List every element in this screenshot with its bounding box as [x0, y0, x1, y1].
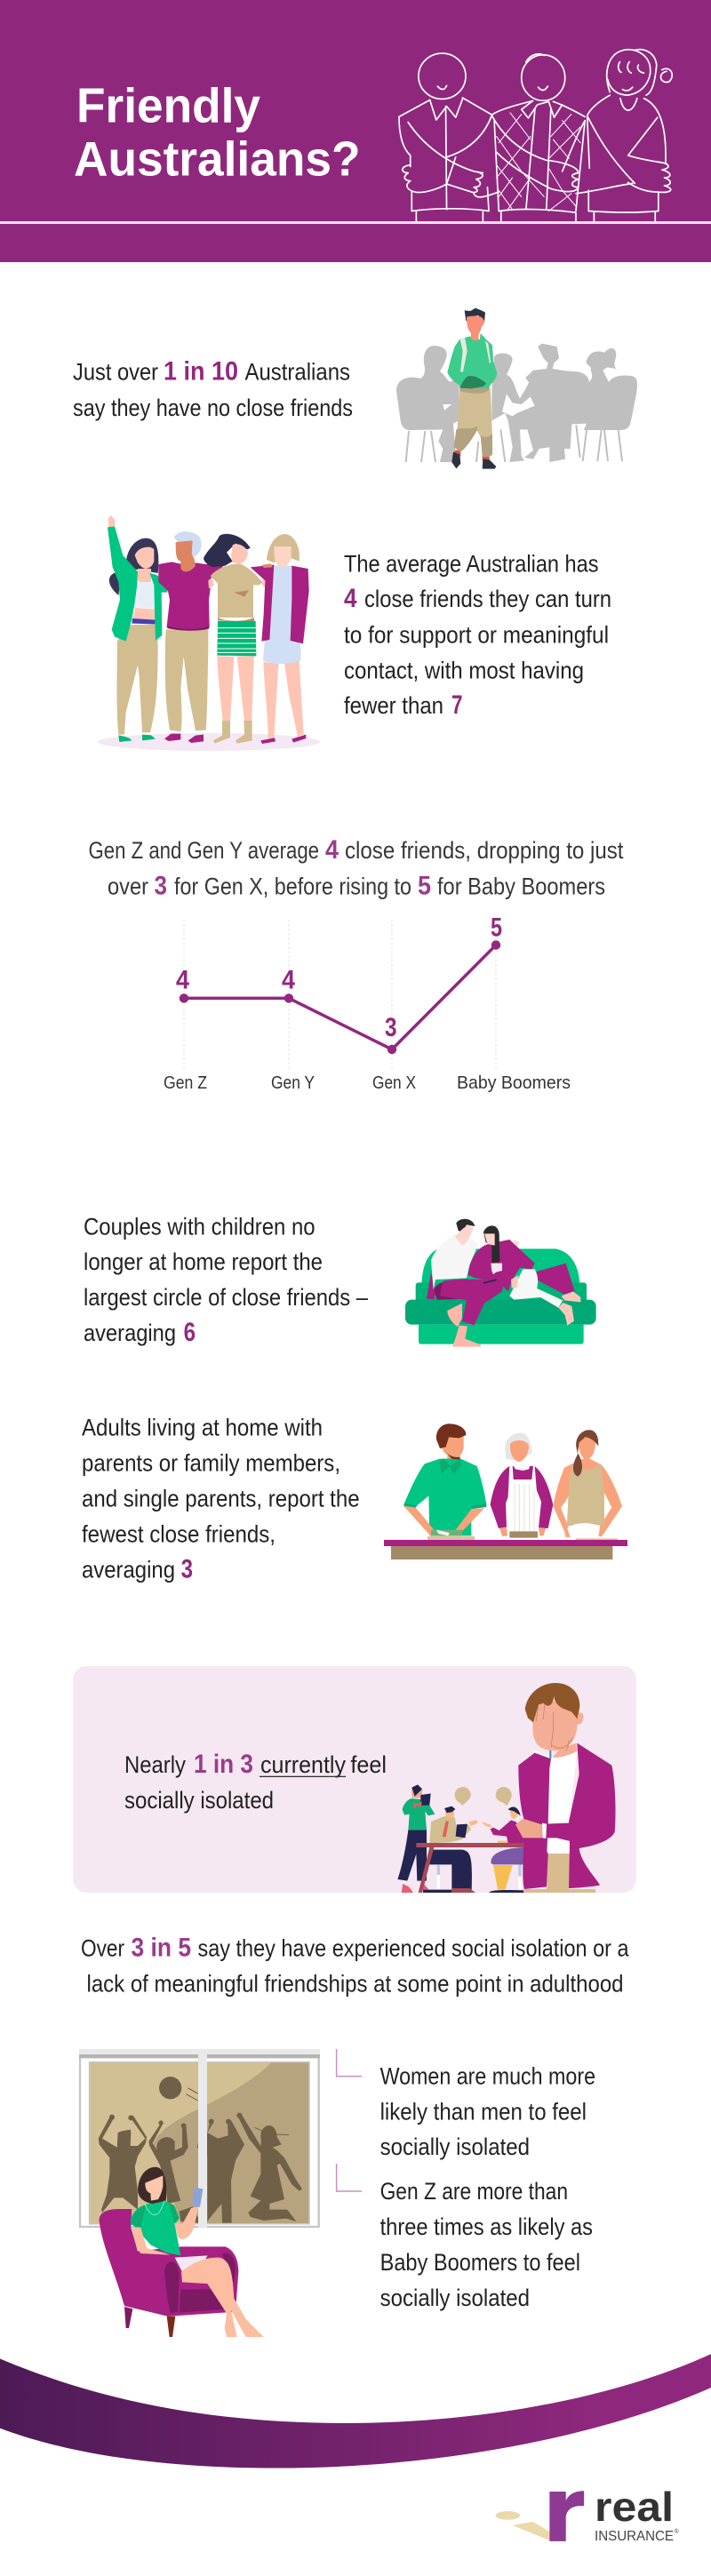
header banner	[0, 0, 711, 262]
large man with hand over face	[515, 1683, 616, 1893]
text: adults living at home: parents or family members,	[82, 1450, 340, 1477]
line chart: close friends by generation	[164, 913, 571, 1093]
text: generations summary: 4	[325, 835, 339, 865]
sofa	[405, 1248, 596, 1344]
text: couples with children: longer at home report the	[84, 1248, 323, 1275]
text: adults living at home: averaging	[82, 1557, 175, 1583]
line chart: close friends by generation: Gen Z	[164, 1073, 207, 1093]
kitchen counter	[384, 1536, 627, 1559]
text: women and Gen Z callouts: Baby Boomers to feel	[380, 2249, 580, 2276]
text: 1 in 10: say they have no close friends	[73, 395, 353, 421]
footer purple wave	[0, 2354, 711, 2468]
text: average Australian has 4 close friends: contact, with most having	[344, 658, 584, 684]
line chart: close friends by generation: Gen Y	[271, 1073, 315, 1093]
text: average Australian has 4 close friends: The average Australian has	[344, 551, 599, 578]
icon: sad man with small office group	[397, 1683, 616, 1893]
line chart: close friends by generation: Gen X	[372, 1073, 416, 1093]
text: adults living at home: 3	[181, 1555, 193, 1584]
text: couples with children: largest circle of close friends –	[84, 1284, 368, 1311]
text: 1 in 10: Just over	[73, 359, 158, 386]
text: 1 in 10: Australians	[245, 359, 350, 386]
text: over 3 in 5	[81, 1934, 629, 1998]
text: generations summary: over	[108, 873, 148, 899]
line chart: close friends by generation: 4	[282, 966, 295, 995]
text: generations summary: 5	[418, 871, 431, 900]
text: couples with children: 6	[184, 1318, 196, 1347]
header banner: Friendly	[76, 78, 260, 133]
icon: three friends line drawing	[399, 50, 672, 221]
text: adults living at home: fewest close friends,	[82, 1521, 276, 1548]
text: 1 in 10	[73, 357, 353, 421]
text: women and Gen Z callouts	[337, 2049, 595, 2311]
text: adults living at home: Adults living at home with	[82, 1415, 323, 1441]
text: average Australian has 4 close friends: 4	[344, 584, 357, 613]
woman in tan tank top	[553, 1430, 622, 1537]
line chart: close friends by generation: 4	[176, 966, 189, 995]
text: 1 in 10: 1 in 10	[164, 357, 238, 386]
callout bracket	[337, 2049, 362, 2077]
logo: Real Insurance: ®	[674, 2528, 679, 2535]
text: average Australian has 4 close friends: close friends they can turn	[364, 586, 611, 612]
text: women and Gen Z callouts: socially isolated	[380, 2285, 530, 2311]
logo: Real Insurance: real	[595, 2484, 674, 2530]
text: average Australian has 4 close friends: fewer than	[344, 692, 443, 719]
text: women and Gen Z callouts: three times as likely as	[380, 2213, 593, 2240]
text: generations summary	[89, 835, 624, 900]
text: generations summary: 3	[155, 871, 167, 900]
icon: four friends hugging	[98, 515, 320, 751]
panel: nearly 1 in 3 socially isolated	[73, 1666, 636, 1893]
panel: nearly 1 in 3 socially isolated: 1 in 3	[194, 1750, 253, 1779]
text: over 3 in 5: say they have experienced social isolation or a	[197, 1935, 629, 1962]
text: women and Gen Z callouts: socially isolated	[380, 2133, 530, 2160]
callout bracket	[337, 2164, 362, 2191]
text: couples with children: averaging	[84, 1320, 176, 1346]
text: couples with children	[84, 1213, 368, 1347]
text: generations summary: for Gen X, before rising to	[174, 873, 411, 899]
line chart: close friends by generation: Baby Boomers	[457, 1073, 571, 1093]
header banner: Australians?	[74, 132, 361, 187]
text: adults living at home	[82, 1415, 360, 1584]
grandmother in apron	[491, 1432, 553, 1539]
text: women and Gen Z callouts: Gen Z are more than	[380, 2178, 568, 2205]
woman in purple pyjama top	[468, 1225, 580, 1326]
text: generations summary: close friends, dropping to just	[345, 837, 624, 864]
icon: couple on green sofa	[405, 1219, 596, 1347]
text: average Australian has 4 close friends	[344, 551, 611, 720]
text: adults living at home: and single parents, report the	[82, 1486, 360, 1512]
grey seated group	[396, 344, 637, 462]
woman in tan top and striped skirt	[204, 534, 265, 744]
line chart: close friends by generation: 5	[491, 913, 502, 943]
text: generations summary: Gen Z and Gen Y average	[89, 837, 319, 864]
woman in purple hoodie	[158, 531, 225, 743]
panel: nearly 1 in 3 socially isolated: Nearly	[124, 1751, 187, 1778]
text: over 3 in 5: 3 in 5	[132, 1934, 191, 1963]
panel: nearly 1 in 3 socially isolated: socially isolated	[124, 1787, 274, 1814]
office group	[397, 1784, 524, 1893]
window with party silhouettes	[79, 2049, 320, 2228]
text: over 3 in 5: Over	[81, 1935, 124, 1962]
icon: woman in armchair by window	[79, 2049, 320, 2337]
icon: lone man among seated silhouettes	[396, 308, 637, 469]
logo: Real Insurance: INSURANCE	[595, 2529, 674, 2544]
logo: Real Insurance	[496, 2484, 679, 2544]
woman in green jacket	[108, 515, 168, 742]
text: women and Gen Z callouts: Women are much more	[380, 2063, 595, 2090]
text: women and Gen Z callouts: likely than men to feel	[380, 2099, 587, 2125]
panel: nearly 1 in 3 socially isolated: feel	[350, 1751, 387, 1778]
text: average Australian has 4 close friends: to for support or meaningful	[344, 621, 609, 648]
panel: nearly 1 in 3 socially isolated: currently	[260, 1751, 347, 1778]
armchair	[100, 2209, 238, 2337]
woman with phone	[131, 2167, 264, 2337]
man in white shirt	[431, 1219, 504, 1347]
text: couples with children: Couples with children no	[84, 1213, 316, 1240]
standing man in green hoodie	[448, 308, 497, 469]
text: generations summary: for Baby Boomers	[437, 873, 605, 899]
text: over 3 in 5: lack of meaningful friendships at some point in adulthood	[87, 1971, 624, 1998]
woman in blue dress and purple cardigan	[251, 534, 309, 744]
icon: family cooking at counter	[384, 1424, 627, 1559]
line chart: close friends by generation: 3	[385, 1013, 396, 1042]
text: average Australian has 4 close friends: 7	[451, 690, 462, 720]
man in green shirt	[403, 1424, 486, 1536]
